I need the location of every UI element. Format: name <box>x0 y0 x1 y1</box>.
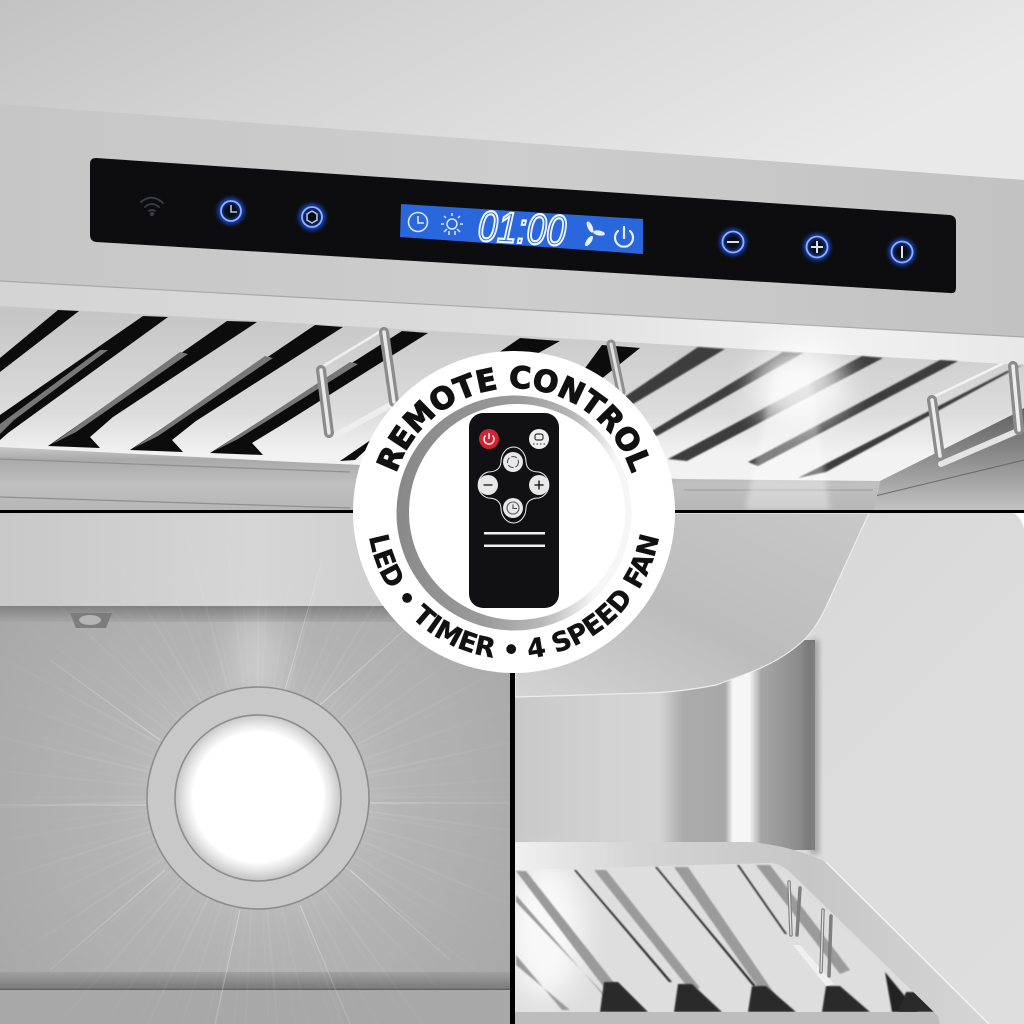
icon: minus button <box>722 231 744 253</box>
curved metal band <box>515 640 815 850</box>
icon: power button <box>891 241 913 263</box>
chrome hooks <box>789 882 834 986</box>
panel: range hood front with touch control <box>0 0 1024 510</box>
icon: lcd clock <box>408 212 428 232</box>
lower trim strip <box>0 972 510 1024</box>
icon: lcd fan <box>585 222 605 246</box>
baffle filter slats <box>0 306 1024 510</box>
top right corner highlight <box>1014 513 1024 529</box>
light beam under hood <box>745 343 846 510</box>
dividers <box>0 510 1024 1024</box>
directional pad outline <box>478 447 549 523</box>
LCD display <box>400 203 643 256</box>
badge: remote control <box>353 351 675 673</box>
icon: light button <box>529 429 549 449</box>
digit readout: 01:00 <box>477 203 567 256</box>
icon: plus button <box>806 236 828 258</box>
chrome handle right <box>931 364 1020 464</box>
icon: light button <box>301 206 323 228</box>
button: timer <box>503 498 523 518</box>
icon: mounting screw <box>70 613 112 628</box>
panel: LED light close-up <box>0 513 510 1024</box>
chrome handle centre <box>611 344 621 392</box>
button: fan speed <box>503 452 523 472</box>
button: plus <box>529 475 549 495</box>
control panel <box>90 158 956 293</box>
text: features: LED • TIMER • 4 SPEED FAN <box>369 534 659 658</box>
metallic ring <box>396 396 632 630</box>
lower front bar <box>0 447 880 510</box>
icon: red power button <box>479 429 499 449</box>
panel: hood side and baffle close-up <box>507 513 1024 1024</box>
icon: wifi <box>141 198 163 215</box>
remote indicator lines <box>484 532 545 547</box>
button: minus <box>478 475 498 495</box>
icon: lcd power <box>615 227 633 247</box>
LED lamp <box>147 687 369 909</box>
icon: lcd lamp <box>441 213 463 235</box>
heading: remote control: REMOTE CONTROL <box>376 365 649 474</box>
upper hood curve <box>515 513 869 697</box>
icon: timer button <box>220 200 242 222</box>
chrome handle left <box>320 331 394 437</box>
remote control device <box>469 413 559 608</box>
curved lip <box>515 842 989 1024</box>
baffle slats <box>507 860 940 1024</box>
light rays <box>0 560 510 1024</box>
